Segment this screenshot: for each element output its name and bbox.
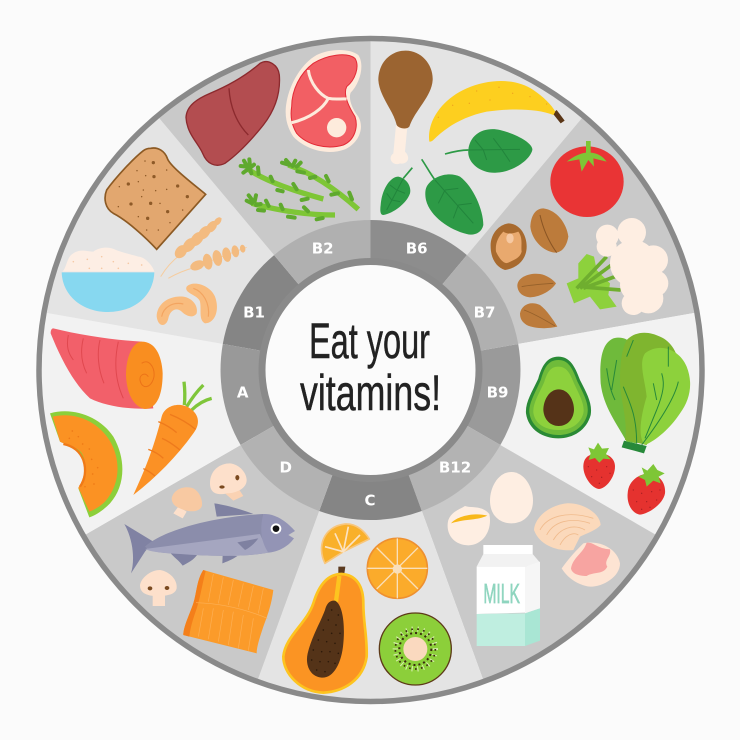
icon: eggs	[448, 472, 533, 545]
icon: cashews	[157, 284, 217, 325]
icon: salmon fillet	[183, 570, 273, 653]
label: B7: B7	[474, 304, 495, 322]
icon: bread slice	[105, 148, 206, 249]
panel: vitamin B2	[157, 38, 370, 370]
ring segment: A	[221, 344, 370, 445]
icon: sweet potato	[51, 328, 163, 409]
icon: clams	[534, 503, 620, 587]
icon: spinach leaves	[380, 129, 532, 235]
wedge: B6 foods background	[370, 38, 584, 370]
icon: rice bowl	[62, 248, 154, 312]
icon: banana	[429, 81, 565, 142]
icon: liver	[186, 62, 280, 165]
wedge: B9 foods background	[370, 312, 703, 536]
icon: strawberries	[583, 443, 665, 515]
panel: vitamin B7	[370, 116, 698, 370]
icon: melon slice	[50, 411, 122, 517]
wedge: C foods background	[257, 370, 484, 702]
icon: papaya	[283, 567, 367, 693]
panel: vitamin D	[83, 370, 370, 682]
icon: milk carton	[477, 545, 540, 646]
wedge: B12 foods background	[370, 370, 658, 682]
title	[300, 313, 441, 421]
icon: orange wedge	[322, 524, 369, 563]
icon: cauliflower	[567, 218, 668, 315]
label: B6: B6	[406, 240, 428, 258]
title line 2: vitamins!	[300, 365, 441, 421]
panel: vitamin B6	[370, 38, 584, 370]
ring segment: B6	[370, 220, 467, 370]
label: B1: B1	[243, 304, 265, 322]
wedge: A foods background	[38, 312, 370, 536]
icon: milk carton: MILK	[483, 578, 520, 609]
ring segment: B7	[370, 255, 518, 370]
label: B2: B2	[312, 240, 334, 258]
icon: steak	[286, 50, 361, 152]
icon: avocado	[526, 357, 591, 438]
label: D: D	[279, 458, 292, 476]
label: B9: B9	[487, 384, 508, 402]
icon: almonds	[517, 274, 557, 328]
wedge: B7 foods background	[370, 116, 698, 370]
ring segment: B1	[223, 255, 370, 370]
icon: mushrooms	[140, 463, 247, 606]
ring segment: B12	[370, 370, 500, 511]
ring segment: C	[319, 370, 422, 520]
title line 1: Eat your	[309, 313, 430, 369]
wedge: B2 foods background	[157, 38, 370, 370]
icon: fish	[124, 503, 295, 573]
ring segment: B2	[274, 220, 370, 370]
icon: asparagus	[241, 159, 358, 219]
panel: vitamin B9	[370, 312, 703, 536]
label: C: C	[364, 492, 376, 510]
panel: vitamin A	[38, 312, 370, 536]
icon: carrot	[133, 382, 212, 495]
label: B12: B12	[439, 458, 471, 476]
icon: orange slice	[367, 538, 427, 598]
ring segment: B9	[370, 344, 520, 445]
panel: vitamin B12	[370, 370, 658, 682]
icon: tomato	[550, 141, 624, 217]
icon: walnut and pecan	[491, 208, 568, 270]
wedge: B1 foods background	[44, 116, 370, 370]
panel: vitamin B1	[44, 116, 370, 370]
wedge: D foods background	[83, 370, 370, 682]
icon: wheat ears	[161, 216, 247, 278]
center disc	[262, 262, 479, 478]
ring segment: D	[241, 370, 370, 511]
icon: chicken drumstick	[378, 51, 433, 164]
icon: kiwi	[379, 613, 451, 685]
label: A: A	[237, 384, 249, 402]
icon: lettuce	[600, 333, 690, 453]
panel: vitamin C	[257, 370, 484, 702]
